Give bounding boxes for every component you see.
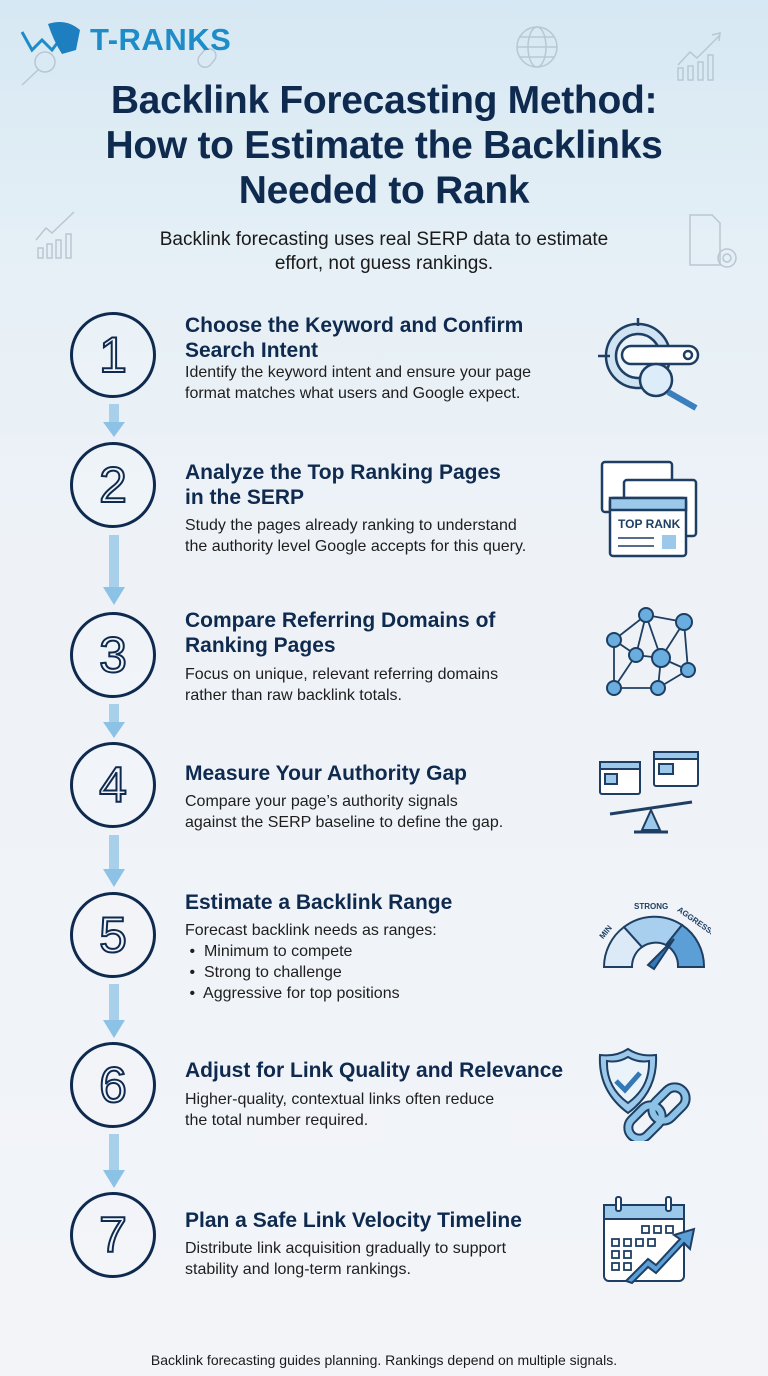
icon: network	[606, 607, 696, 696]
step 1 text: Search Intent	[185, 339, 318, 362]
step circles	[70, 312, 156, 398]
text: Distribute link acquisition gradually to support	[185, 1240, 506, 1257]
arrow 5	[103, 984, 125, 1038]
step 7 text: Plan a Safe Link Velocity Timeline	[185, 1209, 522, 1232]
text: 6	[99, 1057, 127, 1113]
text: format matches what users and Google expect.	[185, 385, 520, 402]
text: 2	[99, 457, 127, 513]
step 2 text: Analyze the Top Ranking Pages	[185, 461, 501, 484]
title: Needed to Rank	[239, 169, 529, 212]
step 5 text: Estimate a Backlink Range	[185, 891, 452, 914]
text: Compare your page’s authority signals	[185, 793, 458, 810]
text: Higher-quality, contextual links often reduce	[185, 1091, 494, 1108]
icon: gauge	[598, 902, 711, 970]
title	[106, 79, 662, 212]
icon: target search	[598, 318, 700, 411]
icon: top rank pages: TOP RANK	[618, 517, 681, 531]
text: Focus on unique, relevant referring domains	[185, 666, 498, 683]
subtitle: Backlink forecasting uses real SERP data to estimate	[160, 229, 608, 250]
text: stability and long-term rankings.	[185, 1261, 411, 1278]
arrow 1	[103, 404, 125, 437]
step 2 text: in the SERP	[185, 486, 304, 509]
arrow 4	[103, 835, 125, 887]
arrow 3	[103, 704, 125, 738]
text: 5	[99, 907, 127, 963]
footer note: Backlink forecasting guides planning. Rankings depend on multiple signals.	[151, 1352, 617, 1368]
icon: top rank pages	[600, 460, 698, 558]
text: • Aggressive for top positions	[189, 985, 400, 1002]
step circles: 1	[99, 327, 127, 383]
text: 4	[99, 757, 127, 813]
icon: shield and chain	[598, 1048, 691, 1141]
text: Forecast backlink needs as ranges:	[185, 922, 437, 939]
step 2 text	[185, 461, 501, 509]
step 1 text	[185, 314, 523, 362]
text: Study the pages already ranking to understand	[185, 517, 517, 534]
step 3 text: Ranking Pages	[185, 634, 336, 657]
background decorative icons	[22, 26, 737, 268]
text: rather than raw backlink totals.	[185, 687, 402, 704]
step 6 text: Adjust for Link Quality and Relevance	[185, 1059, 563, 1082]
title: How to Estimate the Backlinks	[106, 124, 662, 167]
arrow 2	[103, 535, 125, 605]
text: 3	[99, 627, 127, 683]
text: the total number required.	[185, 1112, 368, 1129]
title: Backlink Forecasting Method:	[111, 79, 657, 122]
text: against the SERP baseline to define the gap.	[185, 814, 503, 831]
text: • Strong to challenge	[189, 964, 342, 981]
icon: gauge: MIN	[598, 923, 614, 941]
icon: calendar with growth arrow	[603, 1196, 696, 1284]
logo: T-RANKS	[90, 22, 231, 57]
text: Identify the keyword intent and ensure your page	[185, 364, 531, 381]
logo	[20, 22, 231, 57]
icon: gauge: STRONG	[634, 902, 668, 911]
subtitle: effort, not guess rankings.	[275, 253, 493, 274]
text: • Minimum to compete	[189, 943, 352, 960]
step 1 text: Choose the Keyword and Confirm	[185, 314, 523, 337]
text: 7	[99, 1207, 127, 1263]
text: the authority level Google accepts for this query.	[185, 538, 526, 555]
step 4 text: Measure Your Authority Gap	[185, 762, 467, 785]
subtitle	[160, 229, 608, 274]
step 3 text	[185, 609, 496, 657]
step 3 text: Compare Referring Domains of	[185, 609, 495, 632]
arrow 6	[103, 1134, 125, 1188]
icon: scale comparison	[599, 751, 699, 834]
